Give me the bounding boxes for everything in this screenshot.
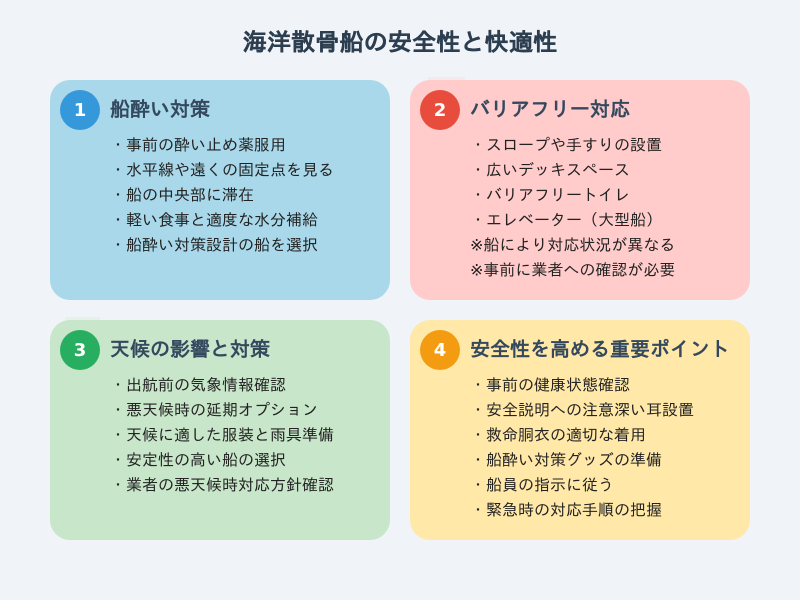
panel: safety points bbox=[410, 320, 750, 540]
list: weather: ・業者の悪天候時対応方針確認 bbox=[110, 476, 334, 494]
icon: number 1 bbox=[60, 90, 100, 130]
icon: number 2: 2 bbox=[434, 100, 446, 121]
icon: number 2 bbox=[420, 90, 460, 130]
list: weather: ・天候に適した服装と雨具準備 bbox=[110, 426, 334, 444]
list: seasickness bbox=[110, 136, 334, 254]
list: seasickness: ・事前の酔い止め薬服用 bbox=[110, 136, 286, 154]
icon: number 1: 1 bbox=[74, 100, 86, 121]
list: safety points: ・船酔い対策グッズの準備 bbox=[470, 450, 662, 470]
list: safety points bbox=[470, 376, 694, 520]
list: seasickness: ・水平線や遠くの固定点を見る bbox=[110, 160, 334, 180]
heading: seasickness: 船酔い対策 bbox=[110, 97, 210, 121]
list: safety points: ・救命胴衣の適切な着用 bbox=[470, 426, 646, 444]
list: barrier free bbox=[470, 136, 675, 280]
panel: seasickness bbox=[50, 80, 390, 300]
heading: weather: 天候の影響と対策 bbox=[110, 337, 270, 361]
list: barrier free: ・広いデッキスペース bbox=[470, 160, 630, 180]
list: seasickness: ・軽い食事と適度な水分補給 bbox=[110, 210, 318, 230]
list: safety points: ・安全説明への注意深い耳設置 bbox=[470, 400, 694, 420]
panel: weather bbox=[50, 317, 390, 540]
list: barrier free: ※事前に業者への確認が必要 bbox=[470, 260, 675, 280]
list: weather: ・悪天候時の延期オプション bbox=[110, 400, 318, 420]
icon: number 4 bbox=[420, 330, 460, 370]
list: barrier free: ※船により対応状況が異なる bbox=[470, 236, 675, 254]
list: safety points: ・船員の指示に従う bbox=[470, 476, 614, 494]
list: barrier free: ・エレベーター（大型船） bbox=[470, 210, 662, 230]
list: seasickness: ・船の中央部に滞在 bbox=[110, 186, 254, 204]
list: barrier free: ・スロープや手すりの設置 bbox=[470, 136, 662, 154]
list: seasickness: ・船酔い対策設計の船を選択 bbox=[110, 236, 318, 254]
icon: number 4: 4 bbox=[434, 340, 446, 361]
list: weather bbox=[110, 376, 334, 494]
list: safety points: ・事前の健康状態確認 bbox=[470, 376, 630, 394]
list: weather: ・安定性の高い船の選択 bbox=[110, 450, 286, 470]
title: 海洋散骨船の安全性と快適性 bbox=[243, 28, 557, 56]
list: safety points: ・緊急時の対応手順の把握 bbox=[470, 500, 662, 520]
icon: number 3 bbox=[60, 330, 100, 370]
panel: barrier free bbox=[410, 77, 750, 300]
icon: number 3: 3 bbox=[74, 340, 86, 361]
heading: safety points: 安全性を高める重要ポイント bbox=[470, 337, 730, 361]
heading: barrier free: バリアフリー対応 bbox=[470, 97, 630, 121]
list: weather: ・出航前の気象情報確認 bbox=[110, 376, 286, 394]
list: barrier free: ・バリアフリートイレ bbox=[470, 186, 630, 204]
